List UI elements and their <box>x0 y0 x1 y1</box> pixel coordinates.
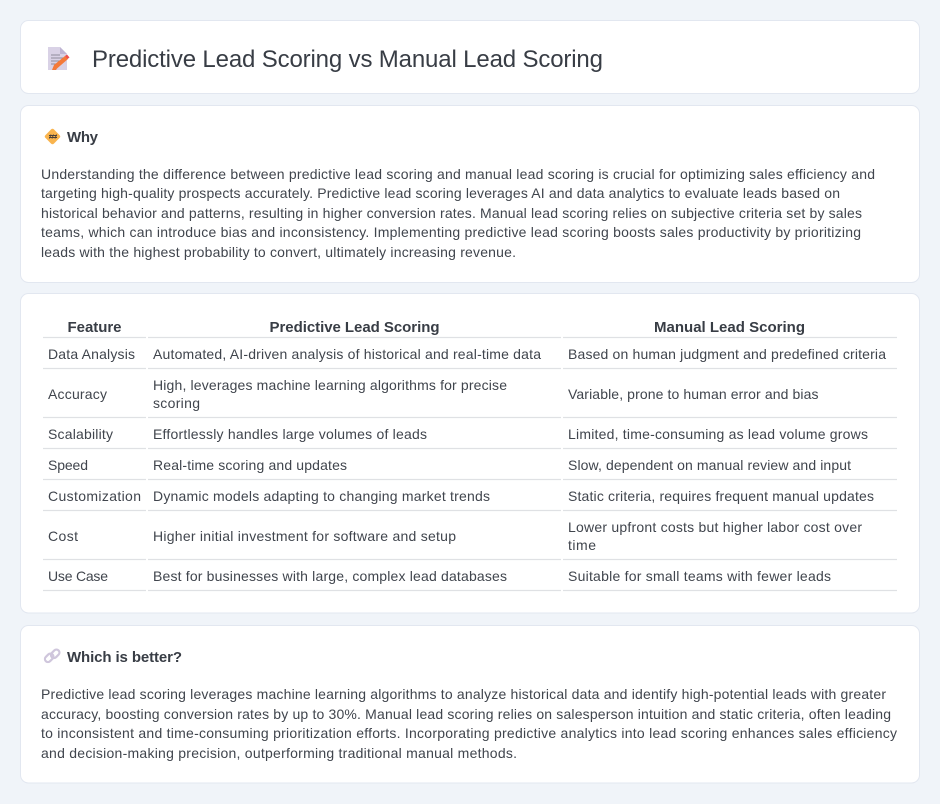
icon: document with pencil <box>48 47 70 70</box>
row: data analysis: Automated, AI-driven analysis of historical and real-time data <box>153 346 541 362</box>
text block: which is better paragraph: accuracy, boosting conversion rates by up to 30%. Manual lead scoring relies on salesperson intuition and static criteria, often leading <box>41 706 891 722</box>
row: accuracy: Accuracy <box>48 386 107 402</box>
row: cost: Lower upfront costs but higher labor cost over <box>568 519 862 535</box>
row: cost: Higher initial investment for software and setup <box>153 528 456 544</box>
text block: why paragraph: historical behavior and patterns, resulting in higher conversion rates. Manual lead scoring relies on subjective criteria set by sales <box>41 205 862 221</box>
panel: which is better <box>20 626 920 783</box>
row: scalability: Effortlessly handles large volumes of leads <box>153 426 427 442</box>
row: scalability: Scalability <box>48 426 113 442</box>
row: speed: Slow, dependent on manual review and input <box>568 457 851 473</box>
row: speed: Real-time scoring and updates <box>153 457 347 473</box>
text block: why paragraph <box>41 166 875 260</box>
row: cost: Cost <box>48 528 78 544</box>
row: use case <box>48 568 831 584</box>
row: accuracy: Variable, prone to human error and bias <box>568 386 818 402</box>
text block: which is better paragraph: Predictive lead scoring leverages machine learning algorithms to analyze historical data and identify high-potential leads with greater <box>41 686 886 702</box>
row: customization <box>48 488 874 504</box>
text block: why paragraph: teams, which can introduce bias and inconsistency. Implementing predictive lead scoring boosts sales productivity by prioritizing <box>41 224 861 240</box>
row: cost <box>48 519 862 553</box>
title: Predictive Lead Scoring vs Manual Lead Scoring <box>92 46 603 73</box>
panel: why <box>20 106 920 282</box>
table header: Manual Lead Scoring <box>654 319 805 336</box>
row: accuracy <box>48 377 818 411</box>
row: accuracy: scoring <box>153 395 200 411</box>
row: use case: Suitable for small teams with fewer leads <box>568 568 831 584</box>
table header: Predictive Lead Scoring <box>270 319 440 336</box>
row: data analysis <box>48 346 886 362</box>
panel: title card <box>20 20 920 94</box>
row: data analysis: Data Analysis <box>48 346 135 362</box>
row: scalability <box>48 426 868 442</box>
text block: which is better paragraph: to inconsistent and time-consuming prioritization efforts. Incorporating predictive analytics into lead scoring enhances sales efficiency <box>41 725 897 741</box>
row: customization: Customization <box>48 488 141 504</box>
row: use case: Use Case <box>48 568 108 584</box>
heading: why: Why <box>67 129 99 146</box>
icon: diamond sign <box>44 128 61 145</box>
row: cost: time <box>568 537 596 553</box>
table header: Feature <box>68 319 122 336</box>
row: accuracy: High, leverages machine learning algorithms for precise <box>153 377 507 393</box>
text block: why paragraph: targeting high-quality prospects accurately. Predictive lead scoring leverages AI and data analytics to evaluate leads based on <box>41 185 840 201</box>
text block: which is better paragraph: and decision-making precision, outperforming traditional manual methods. <box>41 745 517 761</box>
table header <box>68 319 805 336</box>
text block: why paragraph: Understanding the difference between predictive lead scoring and manual lead scoring is crucial for optimizing sales efficiency and <box>41 166 875 182</box>
row: customization: Dynamic models adapting to changing market trends <box>153 488 490 504</box>
text block: why paragraph: leads with the highest probability to convert, ultimately increasing revenue. <box>41 244 516 260</box>
row: scalability: Limited, time-consuming as lead volume grows <box>568 426 868 442</box>
row: customization: Static criteria, requires frequent manual updates <box>568 488 874 504</box>
text block: which is better paragraph <box>41 686 897 761</box>
row: speed <box>48 457 851 473</box>
row: data analysis: Based on human judgment and predefined criteria <box>568 346 886 362</box>
row: speed: Speed <box>48 457 88 473</box>
panel: comparison table <box>20 294 920 613</box>
heading: which is better: Which is better? <box>67 649 182 666</box>
row: use case: Best for businesses with large, complex lead databases <box>153 568 507 584</box>
icon: link <box>44 648 61 663</box>
table rules <box>43 338 897 590</box>
